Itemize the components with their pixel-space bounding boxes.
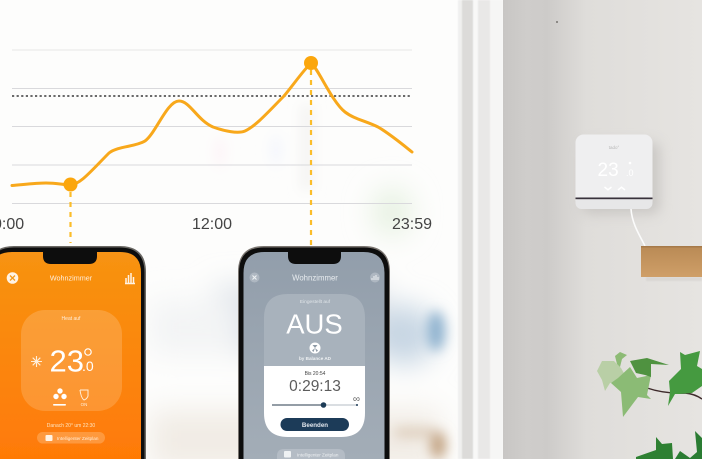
smart thermostat [576,134,652,209]
pale leaf [597,361,625,391]
infinity icon: ∞ [353,394,360,405]
cable [631,209,645,246]
end button: Beenden [302,422,328,429]
up arrow [618,187,625,190]
schedule pill [277,449,345,459]
large light leaf [611,367,651,417]
window frame [458,0,503,459]
close icon [250,272,260,282]
stats icon [125,273,135,284]
brand mark: tado° [609,145,619,150]
small bud leaf [615,352,627,367]
off status: AUS [286,308,343,340]
notch [288,250,341,264]
grid lines [12,50,412,204]
end button [280,418,349,431]
branch [647,388,702,399]
notch [43,250,97,264]
timer slider [272,402,358,408]
end time: Bis 20:54 [305,371,326,377]
fan icon [53,388,67,406]
ivy plant [597,351,702,459]
right leaf [668,351,702,406]
schedule pill [37,432,105,444]
mode note: by Balance AD [299,356,332,361]
temperature curve [12,63,412,186]
phone body [238,246,390,459]
status card [264,294,365,437]
degree ring [85,349,91,355]
close icon [7,272,18,284]
device temperature: 23 [598,160,619,181]
temperature value: 23 [50,344,84,378]
card label: Eingestellt auf [300,299,331,305]
lower leaf [636,437,673,459]
dotted target line [12,95,412,97]
decimal: .0 [82,358,94,374]
countdown: 0:29:13 [289,378,341,395]
swing label: ON [81,402,87,407]
room title: Wohnzimmer [292,274,338,282]
device decimal: .0 [626,168,634,178]
temperature card [21,310,122,411]
marker: morning [64,178,78,192]
shelf [641,246,702,281]
axis label: end: 23:59 [392,216,432,233]
marker: peak [304,56,318,70]
schedule pill: Intelligenter Zeitplan [297,452,339,458]
axis label: noon: 12:00 [192,216,232,233]
device shadow [582,142,660,214]
room title: Wohnzimmer [50,274,93,282]
swing icon [80,390,88,400]
stats icon [370,272,380,282]
phone body [0,246,146,459]
down arrow [604,187,612,190]
upper dark leaf [630,358,669,377]
mode label: Heat auf [62,316,81,322]
lower right leaves [675,431,702,459]
sun icon [31,356,42,367]
dashed drop lines [70,70,311,245]
timer panel [264,366,365,437]
fan badge [310,342,320,354]
schedule pill: Intelligenter Zeitplan [57,436,99,441]
schedule note: Danach 20° um 22:30 [47,423,95,429]
